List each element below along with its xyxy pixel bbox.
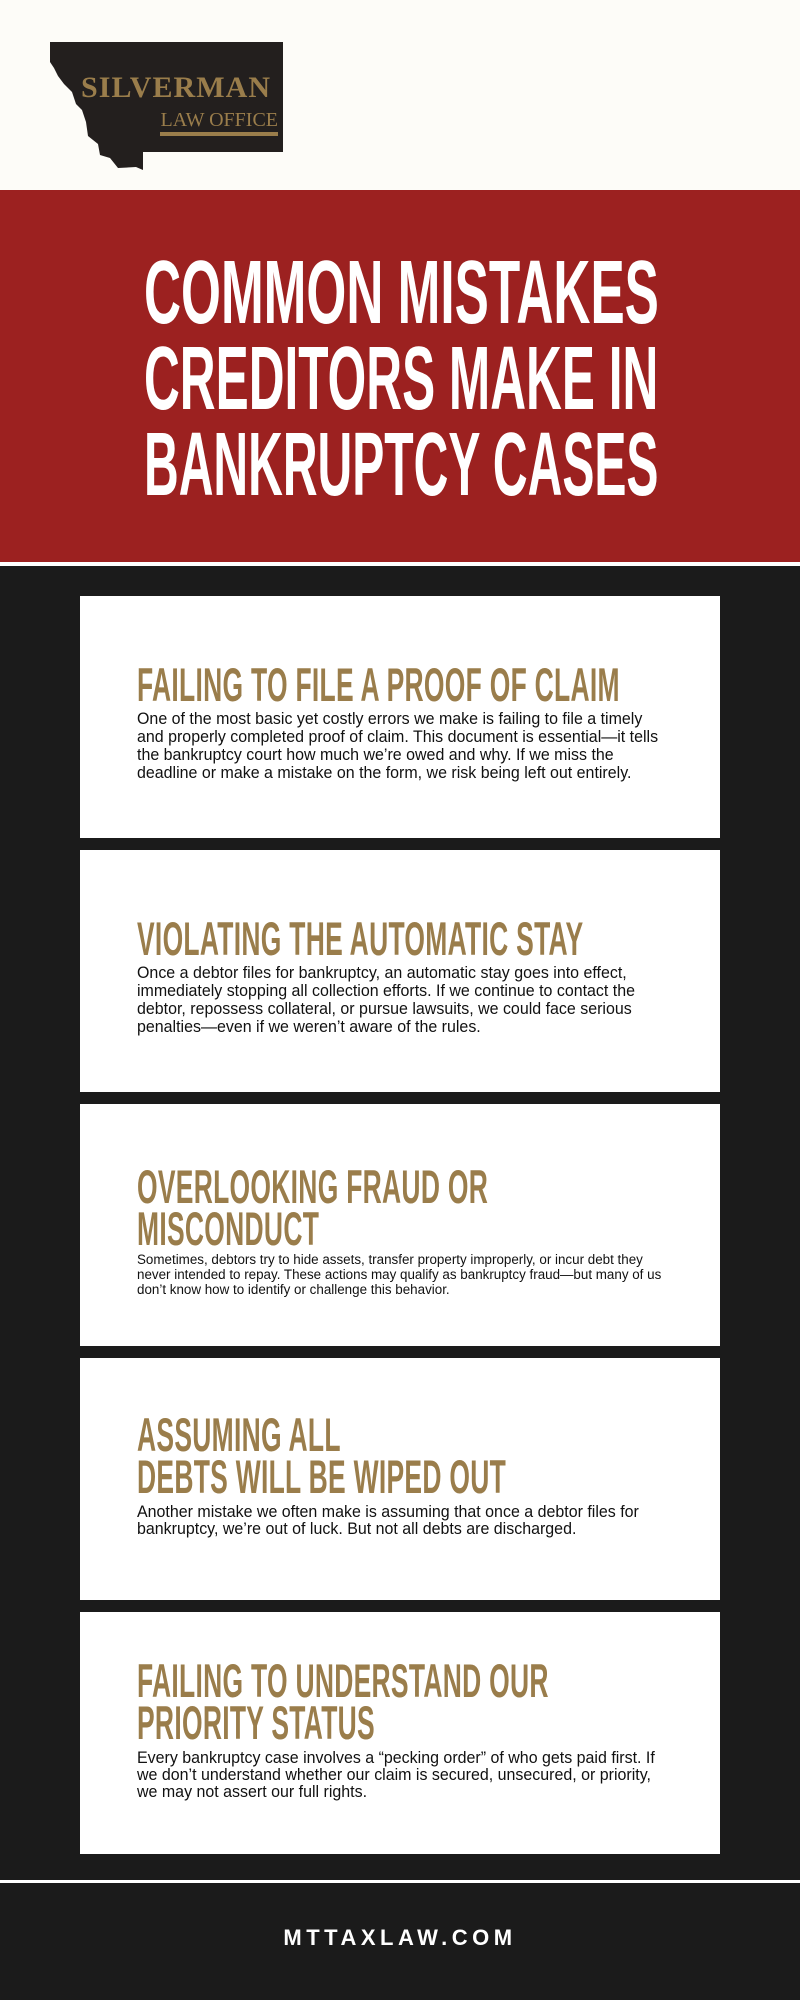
text 5: Every bankruptcy case involves a “pecking order” of who gets paid first. If (137, 1748, 655, 1767)
text 3: don’t know how to identify or challenge this behavior. (137, 1282, 450, 1297)
text 4 (137, 1502, 639, 1538)
text 5: we may not assert our full rights. (137, 1782, 367, 1801)
logo: SILVERMAN (81, 71, 271, 104)
card 5 (80, 1612, 720, 1854)
card 3 (80, 1104, 720, 1346)
heading 4 (137, 1408, 506, 1503)
card 1 (80, 596, 720, 838)
title (144, 243, 659, 515)
text 1: One of the most basic yet costly errors we make is failing to file a timely (137, 709, 642, 728)
text 5 (137, 1748, 655, 1801)
heading 3: MISCONDUCT (137, 1202, 319, 1255)
text 4: Another mistake we often make is assuming that once a debtor files for (137, 1502, 639, 1521)
text 1: and properly completed proof of claim. This document is essential—it tells (137, 727, 658, 746)
text 5: we don’t understand whether our claim is secured, unsecured, or priority, (137, 1765, 651, 1784)
text 2: debtor, repossess collateral, or pursue lawsuits, we could face serious (137, 999, 632, 1018)
heading 1: FAILING TO FILE A PROOF OF CLAIM (137, 658, 620, 711)
text 3: Sometimes, debtors try to hide assets, transfer property improperly, or incur debt they (137, 1252, 643, 1267)
title: CREDITORS MAKE IN (144, 329, 658, 429)
text 1 (137, 709, 658, 782)
heading 3 (137, 1160, 488, 1255)
text 2 (137, 963, 635, 1036)
heading 3: OVERLOOKING FRAUD OR (137, 1160, 488, 1213)
text 2: immediately stopping all collection efforts. If we continue to contact the (137, 981, 635, 1000)
footer url: MTTAXLAW.COM (283, 1925, 517, 1950)
text 3 (137, 1252, 661, 1297)
heading 5: FAILING TO UNDERSTAND OUR (137, 1654, 549, 1707)
text 4: bankruptcy, we’re out of luck. But not all debts are discharged. (137, 1519, 576, 1538)
text 1: the bankruptcy court how much we’re owed and why. If we miss the (137, 745, 614, 764)
title band (0, 190, 800, 562)
title: BANKRUPTCY CASES (144, 415, 658, 515)
header band (0, 0, 800, 190)
heading 5: PRIORITY STATUS (137, 1696, 375, 1749)
text 2: penalties—even if we weren’t aware of the rules. (137, 1017, 481, 1036)
card 4 (80, 1358, 720, 1600)
heading 4: DEBTS WILL BE WIPED OUT (137, 1450, 506, 1503)
text 3: never intended to repay. These actions may qualify as bankruptcy fraud—but many of us (137, 1267, 661, 1282)
heading 2: VIOLATING THE AUTOMATIC STAY (137, 912, 583, 965)
text 1: deadline or make a mistake on the form, we risk being left out entirely. (137, 763, 631, 782)
text 2: Once a debtor files for bankruptcy, an automatic stay goes into effect, (137, 963, 627, 982)
card 2 (80, 850, 720, 1092)
logo (50, 42, 283, 170)
heading 5 (137, 1654, 549, 1749)
logo: LAW OFFICE (161, 109, 278, 131)
heading 4: ASSUMING ALL (137, 1408, 341, 1461)
title: COMMON MISTAKES (144, 243, 659, 343)
